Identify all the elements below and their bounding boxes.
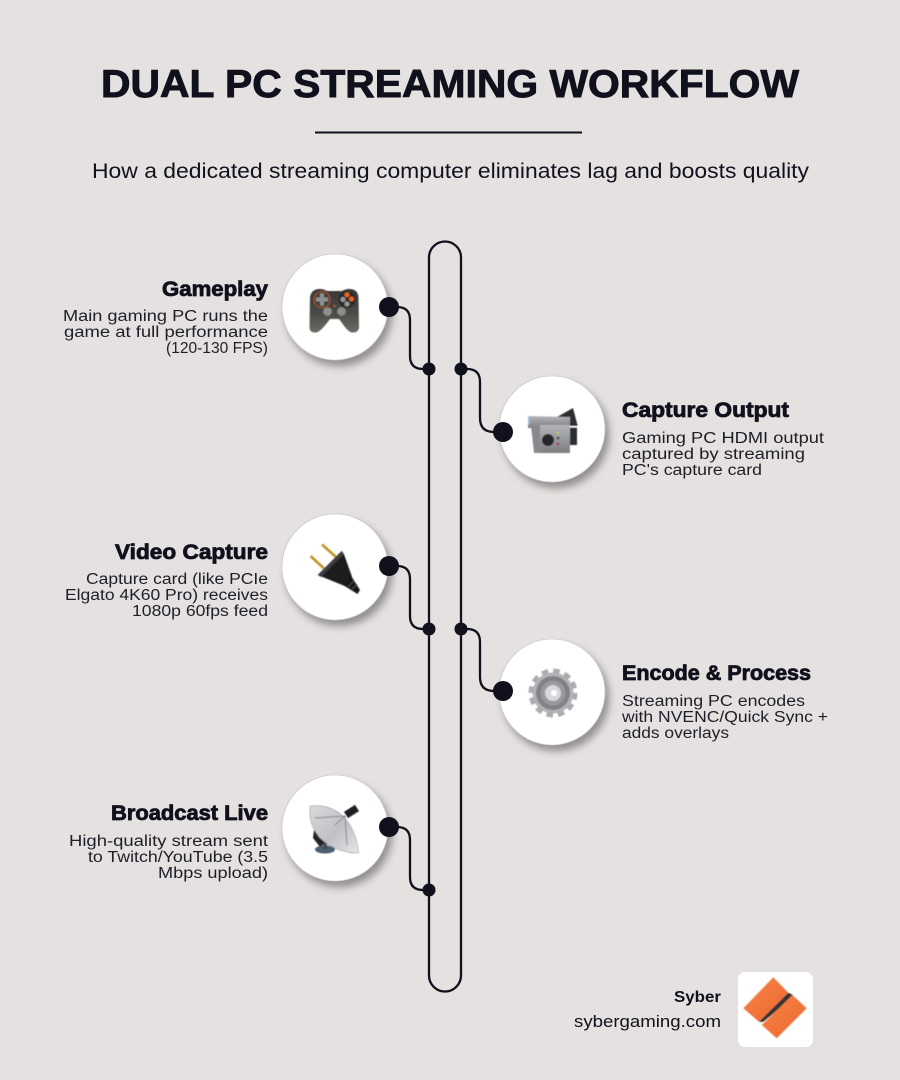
Broadcast Live text: Broadcast Live	[111, 802, 268, 825]
step: Video Capture	[65, 514, 436, 636]
Broadcast Live connector	[379, 817, 436, 896]
Capture Output text: Capture Output	[622, 399, 789, 422]
Broadcast Live text: to Twitch/YouTube (3.5	[88, 849, 268, 866]
icon: game controller	[310, 289, 359, 333]
Broadcast Live icon circle	[282, 775, 388, 881]
icon: video camera	[528, 408, 578, 453]
brand url: sybergaming.com	[574, 1012, 721, 1031]
Video Capture text	[65, 541, 268, 620]
Gameplay text: game at full performance	[64, 324, 268, 341]
title: DUAL PC STREAMING WORKFLOW	[101, 63, 800, 106]
Capture Output text: Gaming PC HDMI output	[622, 430, 825, 447]
step: Encode & Process	[454, 622, 828, 745]
Capture Output connector	[454, 362, 513, 442]
Encode & Process connector	[454, 622, 513, 701]
Capture Output text: captured by streaming	[622, 446, 805, 463]
Gameplay connector	[379, 297, 436, 376]
step: Broadcast Live	[69, 775, 436, 896]
central rail	[429, 242, 461, 992]
Broadcast Live text: Mbps upload)	[158, 865, 268, 882]
Gameplay text: (120-130 FPS)	[166, 340, 268, 357]
step: Capture Output	[454, 362, 825, 482]
Video Capture connector	[379, 556, 436, 636]
Capture Output icon circle	[499, 376, 605, 482]
icon: gear	[531, 671, 575, 715]
brand name: Syber	[674, 989, 721, 1006]
subtitle: How a dedicated streaming computer eliminates lag and boosts quality	[92, 160, 810, 183]
Video Capture text: Elgato 4K60 Pro) receives	[65, 587, 268, 604]
Encode & Process icon circle	[499, 639, 605, 745]
Encode & Process text: adds overlays	[622, 725, 729, 742]
brand logo	[738, 972, 813, 1047]
step: Gameplay	[63, 254, 436, 376]
Broadcast Live text	[69, 802, 269, 882]
Encode & Process text: Encode & Process	[622, 662, 811, 685]
Video Capture text: Video Capture	[115, 541, 268, 564]
Encode & Process text	[621, 662, 828, 742]
icon: satellite dish	[310, 806, 358, 854]
Video Capture icon circle	[282, 514, 388, 620]
Encode & Process text: with NVENC/Quick Sync +	[621, 709, 828, 726]
Gameplay text: Gameplay	[162, 278, 268, 301]
Broadcast Live text: High-quality stream sent	[69, 833, 269, 850]
Gameplay text: Main gaming PC runs the	[63, 308, 268, 325]
Gameplay text	[63, 278, 268, 357]
Video Capture text: 1080p 60fps feed	[132, 603, 268, 620]
Encode & Process text: Streaming PC encodes	[622, 693, 805, 710]
Capture Output text	[622, 399, 825, 479]
Capture Output text: PC's capture card	[622, 462, 762, 479]
icon: power plug	[310, 544, 360, 594]
Video Capture text: Capture card (like PCIe	[86, 571, 268, 588]
Gameplay icon circle	[282, 254, 388, 360]
footer brand	[574, 972, 813, 1047]
